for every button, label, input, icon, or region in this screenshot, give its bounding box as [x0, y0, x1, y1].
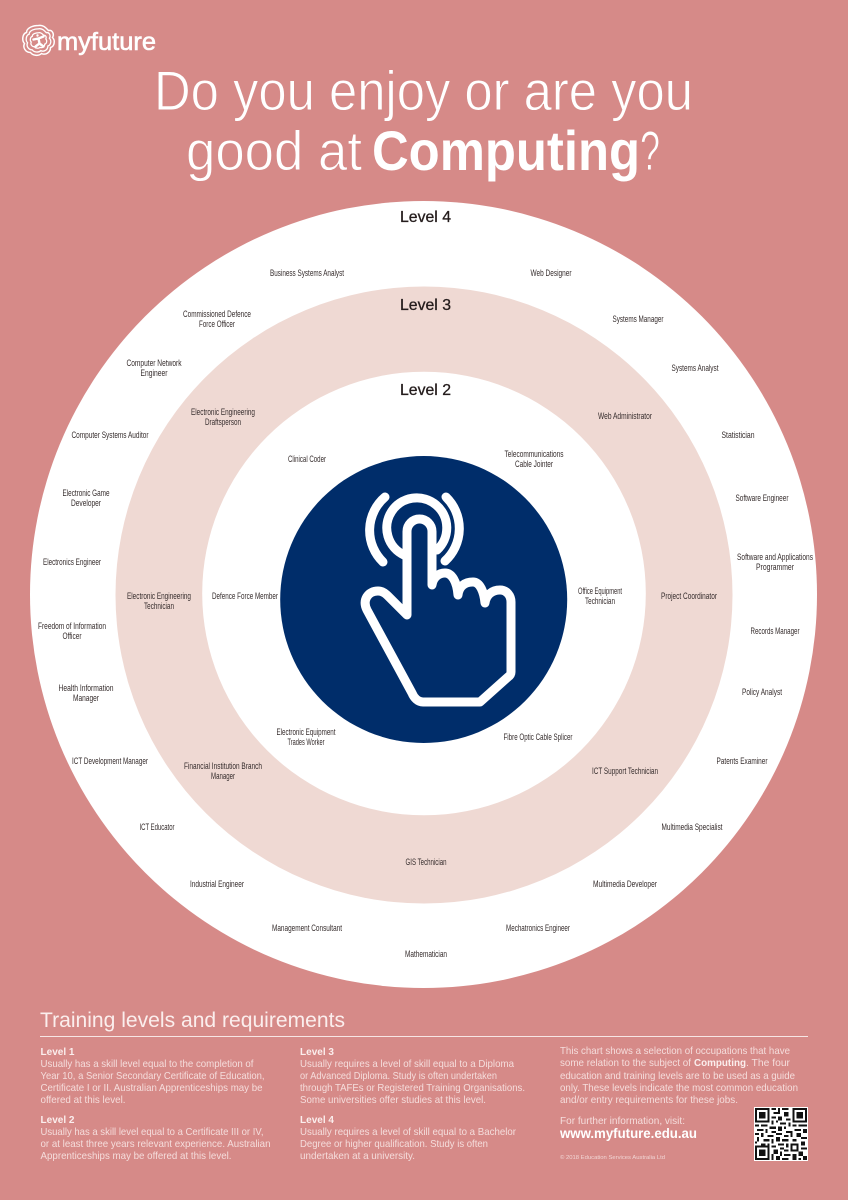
text block: level 2: or at least three years relevant experience. Australian	[40, 1138, 271, 1150]
text block: chart note: Computing	[694, 1057, 746, 1069]
text block: level 2: Usually has a skill level equal to a Certificate III or IV,	[40, 1126, 264, 1138]
QR code	[754, 1107, 808, 1161]
occupations: level 2: Trades Worker	[288, 737, 325, 747]
title: Do you enjoy or are you	[154, 59, 693, 122]
text block: level 4	[300, 1114, 516, 1162]
occupations: level 4: ICT Development Manager	[72, 756, 148, 766]
occupations: level 4: Mathematician	[405, 949, 447, 959]
occupations: level 2: Cable Jointer	[515, 459, 553, 469]
text block: chart note: education and training levels are to be used as a guide	[560, 1070, 795, 1082]
occupations: level 4: Mechatronics Engineer	[506, 923, 570, 933]
ring: level 3	[116, 286, 732, 904]
centre disc: level 1	[280, 456, 567, 743]
occupations: level 2	[212, 449, 622, 747]
occupations: level 2: Clinical Coder	[288, 454, 326, 464]
heading: level 3: Level 3	[400, 297, 451, 314]
occupations: level 4: Business Systems Analyst	[270, 268, 344, 278]
text block: level 1	[40, 1046, 264, 1106]
occupations: level 4: Management Consultant	[272, 923, 342, 933]
occupations: level 4: Software and Applications	[737, 552, 813, 562]
footer heading: Training levels and requirements	[40, 1009, 345, 1032]
occupations: level 2: Fibre Optic Cable Splicer	[504, 732, 572, 742]
occupations: level 4: Industrial Engineer	[190, 879, 244, 889]
occupations: level 3: Manager	[211, 771, 235, 781]
occupations: level 3: Draftsperson	[205, 417, 241, 427]
occupations: level 4: Health Information	[58, 683, 114, 693]
occupations: level 4: Web Designer	[530, 268, 572, 278]
text block: chart note: only. These levels indicate the most common education	[560, 1082, 798, 1094]
occupations: level 3: Project Coordinator	[661, 591, 717, 601]
occupations: level 4: Engineer	[140, 368, 168, 378]
text block: level 1: Level 1	[40, 1046, 75, 1058]
occupations: level 3	[127, 407, 717, 867]
occupations: level 4: ICT Educator	[140, 822, 175, 832]
further information link	[559, 1115, 697, 1141]
title: good at	[186, 119, 362, 182]
occupations: level 4: Records Manager	[750, 626, 800, 636]
title: Computing	[372, 119, 640, 182]
occupations: level 4: Programmer	[756, 562, 794, 572]
heading: level 2: Level 2	[400, 382, 451, 399]
logo: myfuture	[23, 25, 156, 56]
occupations: level 2: Technician	[585, 596, 615, 606]
occupations: level 3: Electronic Engineering	[127, 591, 191, 601]
occupations: level 4: Software Engineer	[736, 493, 788, 503]
ring: level 2	[202, 372, 646, 815]
text block: level 2: Level 2	[40, 1114, 75, 1126]
occupations: level 3: ICT Support Technician	[592, 766, 658, 776]
text block: level 4: Usually requires a level of skill equal to a Bachelor	[300, 1126, 516, 1138]
icon: logo swirl	[23, 25, 54, 55]
further information link: For further information, visit:	[560, 1115, 685, 1127]
text block: level 1: Certificate I or II. Australian Apprenticeships may be	[40, 1082, 263, 1094]
ring: level 4	[30, 201, 817, 988]
occupations: level 4: Multimedia Specialist	[662, 822, 723, 832]
copyright: © 2018 Education Services Australia Ltd	[560, 1154, 665, 1161]
icon: hand tapping	[365, 497, 511, 702]
occupations: level 4: Force Officer	[199, 319, 235, 329]
text block: chart note: and/or entry requirements for these jobs.	[560, 1094, 738, 1106]
occupations: level 4: Electronics Engineer	[43, 557, 101, 567]
occupations: level 4: Systems Analyst	[672, 363, 719, 373]
title: ?	[640, 119, 660, 182]
occupations: level 2: Office Equipment	[578, 586, 622, 596]
text block: level 1: Usually has a skill level equal to the completion of	[40, 1058, 254, 1070]
occupations: level 4: Systems Manager	[612, 314, 664, 324]
occupations: level 3: Technician	[144, 601, 174, 611]
logo wordmark: myfuture	[57, 28, 156, 56]
text block: level 4: undertaken at a university.	[300, 1150, 415, 1162]
heading: level 4: Level 4	[400, 209, 451, 226]
occupations: level 3: GIS Technician	[406, 857, 446, 867]
text block: level 3: Usually requires a level of skill equal to a Diploma	[300, 1058, 514, 1070]
occupations: level 4: Commissioned Defence	[183, 309, 251, 319]
occupations: level 4: Manager	[73, 693, 99, 703]
occupations: level 4: Statistician	[722, 430, 754, 440]
occupations: level 2: Defence Force Member	[212, 591, 278, 601]
text block: level 1: offered at this level.	[40, 1094, 126, 1106]
text block: level 3: or Advanced Diploma. Study is often undertaken	[300, 1070, 497, 1082]
occupations: level 4: Multimedia Developer	[593, 879, 657, 889]
text block: chart note	[560, 1045, 798, 1106]
occupations: level 3: Electronic Engineering	[191, 407, 255, 417]
occupations: level 4: Developer	[71, 498, 101, 508]
occupations: level 4	[38, 268, 813, 959]
text block: level 4: Level 4	[300, 1114, 334, 1126]
text block: level 3: Some universities offer studies at this level.	[300, 1094, 486, 1106]
occupations: level 4: Officer	[62, 631, 82, 641]
further information link: www.myfuture.edu.au	[559, 1126, 697, 1141]
text block: level 1: Year 10, a Senior Secondary Certificate of Education,	[40, 1070, 264, 1082]
occupations: level 4: Computer Systems Auditor	[72, 430, 148, 440]
text block: level 3	[300, 1046, 525, 1106]
occupations: level 4: Freedom of Information	[38, 621, 106, 631]
concentric level chart	[30, 201, 817, 988]
text block: level 4: Degree or higher qualification. Study is often	[300, 1138, 488, 1150]
occupations: level 4: Electronic Game	[62, 488, 110, 498]
title	[154, 59, 693, 182]
text block: level 3: Level 3	[300, 1046, 334, 1058]
occupations: level 4: Policy Analyst	[742, 687, 782, 697]
occupations: level 2: Electronic Equipment	[276, 727, 336, 737]
text block: level 2: Apprenticeships may be offered at this level.	[40, 1150, 232, 1162]
occupations: level 4: Computer Network	[126, 358, 182, 368]
text block: chart note: This chart shows a selection of occupations that have	[560, 1045, 790, 1057]
occupations: level 4: Patents Examiner	[716, 756, 768, 766]
occupations: level 3: Financial Institution Branch	[184, 761, 262, 771]
text block: chart note: . The four	[746, 1057, 790, 1069]
text block: level 2	[40, 1114, 271, 1162]
text block: chart note: some relation to the subject of	[560, 1057, 691, 1069]
occupations: level 2: Telecommunications	[504, 449, 564, 459]
text block: level 3: through TAFEs or Registered Training Organisations.	[300, 1082, 525, 1094]
occupations: level 3: Web Administrator	[598, 411, 652, 421]
